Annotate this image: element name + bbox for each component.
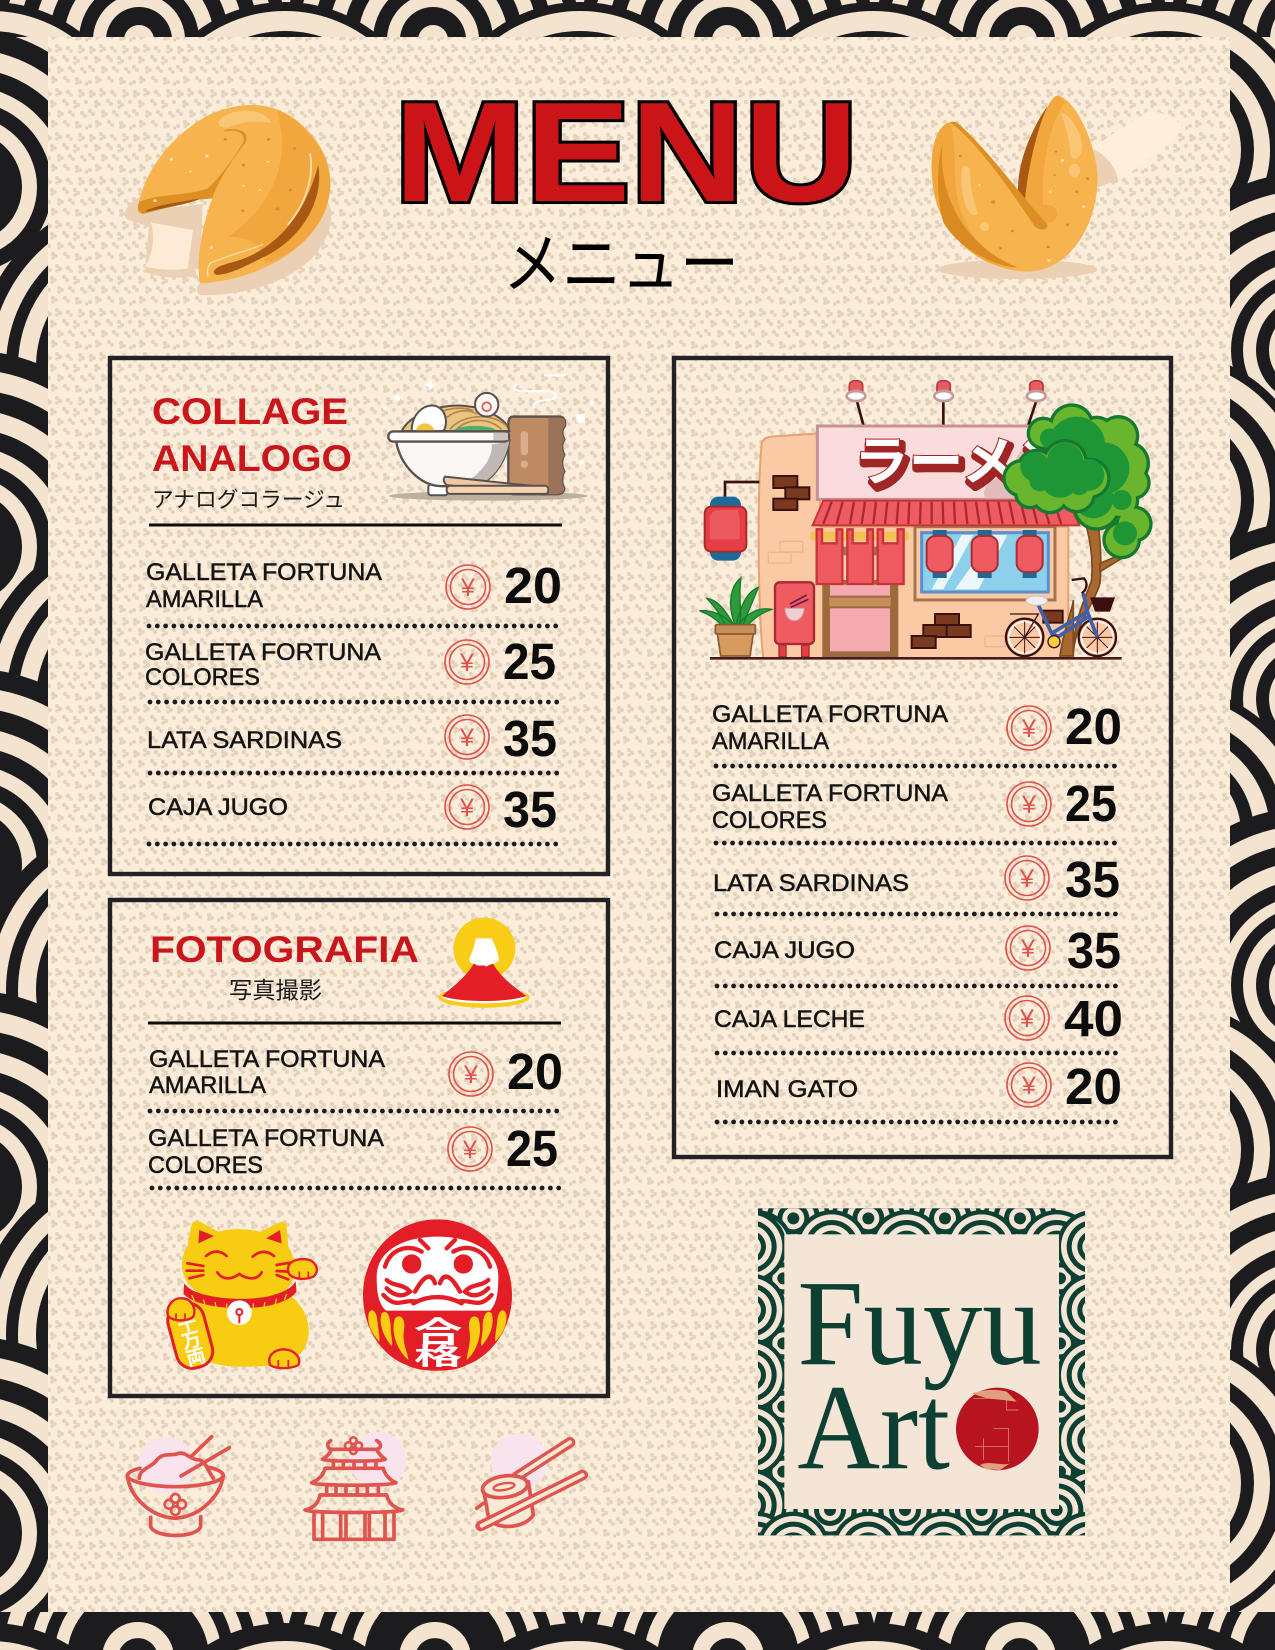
menu row: galleta fortuna colores 25: GALLETA FORTUNA (712, 780, 948, 807)
menu row: galleta fortuna amarilla 20: 20 (507, 1043, 563, 1100)
menu row: caja jugo 35: 35 (1067, 922, 1121, 979)
illustration: ramen shop (699, 381, 1153, 658)
logo wordmark: Art: Art (797, 1361, 950, 1496)
menu row: galleta fortuna amarilla 20: ¥ (460, 574, 475, 602)
mailbox (775, 582, 814, 657)
divider rule (149, 524, 562, 526)
logo: Fuyu Art (758, 1208, 1085, 1536)
menu row: galleta fortuna colores 25 (145, 633, 560, 702)
menu row: galleta fortuna colores 25 (148, 1120, 563, 1188)
menu row: caja leche 40 (714, 990, 1123, 1053)
heading: fotografia: FOTOGRAFIA (150, 928, 419, 970)
icon: rice bowl (127, 1437, 229, 1535)
panel: collage analogo (110, 358, 608, 874)
menu row: galleta fortuna amarilla 20: GALLETA FORTUNA (146, 559, 382, 586)
front foliage (1002, 439, 1111, 514)
menu row: galleta fortuna amarilla 20: GALLETA FORTUNA (149, 1046, 385, 1073)
sign: ramen: ラーメン (854, 433, 1071, 492)
logo wordmark: Fuyu: Fuyu (797, 1256, 1042, 1391)
menu row: galleta fortuna colores 25: 25 (503, 633, 556, 690)
icon: pagoda (305, 1432, 407, 1539)
menu row: lata sardinas 35: LATA SARDINAS (147, 727, 342, 754)
menu row: galleta fortuna amarilla 20: AMARILLA (712, 728, 829, 755)
illustration: daruma doll (363, 1219, 512, 1371)
divider rule (148, 1022, 561, 1024)
menu row: caja jugo 35: 35 (503, 781, 557, 838)
heading: fotografia: 写真撮影 (229, 977, 322, 1003)
menu row: caja jugo 35 (148, 781, 559, 844)
menu row: galleta fortuna amarilla 20 (146, 557, 562, 626)
menu row: galleta fortuna colores 25: ¥ (1021, 791, 1036, 819)
sign: ramen (817, 426, 1076, 499)
menu row: galleta fortuna amarilla 20: GALLETA FORTUNA (712, 701, 948, 728)
menu row: galleta fortuna amarilla 20: 20 (504, 557, 562, 614)
menu row: galleta fortuna amarilla 20 (149, 1043, 563, 1111)
illustration: lucky cat: 万 (180, 1329, 204, 1354)
menu row: galleta fortuna colores 25: ¥ (459, 649, 474, 677)
illustration: lucky cat: 両 (184, 1346, 208, 1371)
menu row: lata sardinas 35: 35 (1065, 851, 1120, 908)
illustration: lucky cat (164, 1221, 317, 1373)
illustration: daruma doll: 合 (414, 1317, 462, 1350)
menu row: galleta fortuna colores 25: GALLETA FORTUNA (148, 1125, 384, 1152)
menu row: galleta fortuna colores 25: 25 (506, 1120, 558, 1177)
heading: fotografia (150, 928, 419, 1003)
menu row: iman gato 20 (716, 1058, 1122, 1122)
back foliage (1027, 403, 1153, 559)
menu row: lata sardinas 35: ¥ (1019, 865, 1034, 893)
menu row: caja leche 40: 40 (1064, 990, 1123, 1047)
menu row: caja jugo 35: CAJA JUGO (714, 937, 855, 964)
menu row: caja jugo 35: ¥ (459, 794, 474, 822)
menu row: lata sardinas 35 (713, 851, 1120, 914)
illustration: mount fuji and sun (438, 918, 530, 1008)
menu row: lata sardinas 35: ¥ (459, 724, 474, 752)
heading: collage analogo: ANALOGO (152, 437, 352, 479)
menu row: caja jugo 35 (714, 922, 1121, 986)
illustration: daruma doll: 格 (414, 1344, 462, 1371)
illustration: right fortune cookie (932, 96, 1182, 279)
menu row: galleta fortuna amarilla 20 (712, 698, 1122, 766)
menu row: caja jugo 35: CAJA JUGO (148, 794, 288, 821)
title: MENU: MENU (394, 73, 858, 232)
illustration: ramen bowl and cup (383, 375, 594, 501)
illustration: lucky cat: 千 (175, 1311, 199, 1337)
menu row: caja jugo 35: ¥ (1020, 935, 1035, 963)
illustration: left fortune cookie (125, 105, 331, 295)
heading: collage analogo (152, 390, 352, 512)
heading: collage analogo: アナログコラージュ (152, 488, 345, 512)
menu row: galleta fortuna colores 25: COLORES (712, 807, 827, 834)
heading: collage analogo: COLLAGE (152, 390, 348, 432)
menu row: galleta fortuna amarilla 20: AMARILLA (149, 1072, 266, 1099)
menu row: galleta fortuna colores 25: COLORES (148, 1152, 263, 1179)
menu row: iman gato 20: ¥ (1021, 1072, 1036, 1100)
menu row: caja leche 40: ¥ (1019, 1005, 1034, 1033)
menu row: galleta fortuna amarilla 20: 20 (1065, 698, 1122, 755)
menu row: iman gato 20: IMAN GATO (716, 1076, 858, 1103)
menu row: galleta fortuna colores 25: GALLETA FORTUNA (145, 639, 381, 666)
menu row: galleta fortuna colores 25 (712, 775, 1120, 843)
menu row: galleta fortuna colores 25: ¥ (462, 1136, 477, 1164)
menu row: galleta fortuna colores 25: COLORES (145, 664, 260, 691)
sign: ramen: ラーメン (857, 437, 1073, 496)
menu row: lata sardinas 35: 35 (503, 710, 557, 767)
menu row: lata sardinas 35: LATA SARDINAS (713, 870, 909, 897)
menu row: galleta fortuna amarilla 20: ¥ (463, 1061, 478, 1089)
menu row: lata sardinas 35 (147, 710, 560, 773)
bicycle (1006, 578, 1116, 656)
logo: red sun (956, 1388, 1039, 1470)
panel: fotografia (110, 900, 608, 1396)
panel: ramen shop menu (674, 358, 1171, 1157)
menu row: galleta fortuna amarilla 20: ¥ (1021, 715, 1036, 743)
subtitle: menu in katakana: メニュー (503, 227, 739, 301)
potted plant (699, 578, 772, 656)
menu row: galleta fortuna colores 25: 25 (1065, 775, 1117, 832)
menu row: galleta fortuna amarilla 20: AMARILLA (146, 586, 263, 613)
menu row: iman gato 20: 20 (1065, 1058, 1122, 1115)
icon: sushi and chopsticks (477, 1433, 583, 1526)
menu row: caja leche 40: CAJA LECHE (714, 1006, 865, 1033)
